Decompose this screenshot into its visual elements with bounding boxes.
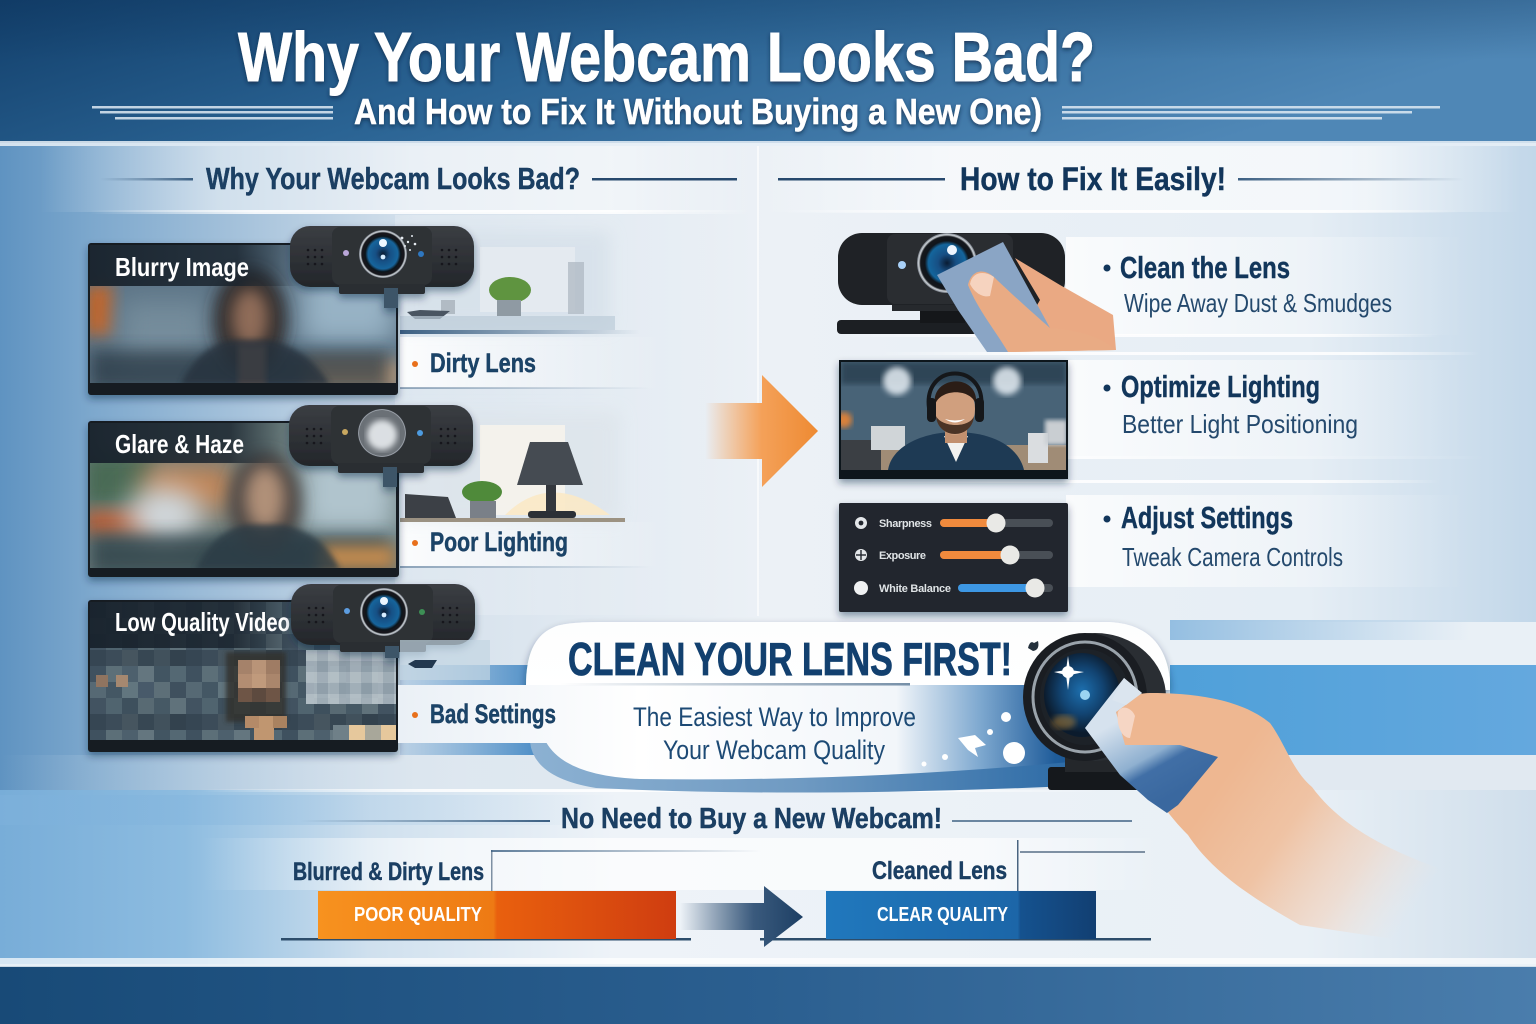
scene: desk behind third webcam xyxy=(400,640,490,680)
heading: how to fix it: How to Fix It Easily! xyxy=(960,161,1226,197)
cloth top fold xyxy=(1112,678,1142,705)
fix 2 image: well-lit video call xyxy=(836,360,1068,479)
bar: clear quality: CLEAR QUALITY xyxy=(877,904,1009,926)
arrow: before to after xyxy=(680,886,803,947)
fix 2 text xyxy=(1104,369,1358,439)
icon: dirty webcam xyxy=(290,226,474,308)
footer band xyxy=(0,964,1536,1024)
icon: wiping hand xyxy=(1010,258,1116,352)
callout heading: CLEAN YOUR LENS FIRST! xyxy=(568,633,1012,685)
comparison bars xyxy=(281,840,1151,947)
callout text: Your Webcam Quality xyxy=(663,735,885,765)
scene: desk lamp behind second webcam xyxy=(400,412,625,522)
icon: webcam with glare xyxy=(289,405,473,487)
label: cleaned lens: Cleaned Lens xyxy=(872,857,1007,885)
fix 3 text xyxy=(1104,500,1343,572)
header shade xyxy=(90,602,300,648)
cloth xyxy=(1085,678,1218,813)
label: low quality video: Low Quality Video xyxy=(115,607,290,637)
fix 3 text: Tweak Camera Controls xyxy=(1122,542,1343,572)
fix 1 text: Wipe Away Dust & Smudges xyxy=(1124,288,1392,318)
callout: clean your lens first xyxy=(398,622,1170,793)
label: blurry image: Blurry Image xyxy=(115,252,249,282)
fix 1 image: cleaning webcam xyxy=(837,233,1116,352)
title: Why Your Webcam Looks Bad? xyxy=(238,18,1095,96)
heading: why webcam looks bad: Why Your Webcam Looks Bad? xyxy=(206,161,580,196)
header shade xyxy=(90,245,300,286)
panel: glare and haze xyxy=(85,421,399,577)
sharpness slider: Sharpness xyxy=(879,518,932,530)
exposure slider xyxy=(855,546,1053,564)
scene: office shelf behind first webcam xyxy=(400,232,640,334)
fix 2 text: Better Light Positioning xyxy=(1122,409,1358,439)
fix 3 text: Adjust Settings xyxy=(1121,500,1293,535)
cause: bad settings: Bad Settings xyxy=(430,699,556,729)
icon: hand wiping lens xyxy=(1085,678,1450,940)
cause: bad settings xyxy=(412,699,556,729)
bar: poor quality: POOR QUALITY xyxy=(354,904,483,926)
callout text xyxy=(633,702,916,765)
sharpness slider xyxy=(855,514,1053,532)
panel: low quality video xyxy=(88,600,398,752)
ribbon base xyxy=(530,742,1070,793)
middle strip xyxy=(398,685,1088,743)
sparkles xyxy=(922,712,1025,766)
icon: large webcam lens xyxy=(1023,633,1166,790)
top cap xyxy=(526,622,1170,690)
fix 3 image: settings panel xyxy=(839,503,1068,612)
icon: webcam low quality xyxy=(291,584,475,658)
panel: blurry image xyxy=(85,243,400,395)
subtitle: And How to Fix It Without Buying a New One) xyxy=(354,91,1042,132)
white balance slider: White Balance xyxy=(879,583,951,595)
header shade xyxy=(90,423,290,463)
small mark xyxy=(1028,641,1038,651)
fix 1 text: Clean the Lens xyxy=(1120,250,1290,285)
label: blurred lens: Blurred & Dirty Lens xyxy=(293,858,484,886)
callout text: The Easiest Way to Improve xyxy=(633,702,916,732)
row strips xyxy=(400,237,1486,587)
thumb xyxy=(968,272,1115,352)
bar: clear quality xyxy=(826,891,1096,939)
icon: cloth xyxy=(937,242,1050,352)
header band xyxy=(0,0,1536,146)
white balance slider xyxy=(854,578,1053,598)
fix 1 text xyxy=(1104,250,1392,318)
nail xyxy=(1118,708,1135,738)
cause: poor lighting: Poor Lighting xyxy=(430,527,568,557)
cause: dirty lens: Dirty Lens xyxy=(430,348,536,378)
exposure slider: Exposure xyxy=(879,550,926,562)
heading: no need to buy: No Need to Buy a New Webcam! xyxy=(561,803,942,835)
bar: poor quality xyxy=(318,891,676,939)
label: glare and haze: Glare & Haze xyxy=(115,429,244,459)
fix 2 text: Optimize Lighting xyxy=(1121,369,1320,404)
arrow: problem to fix xyxy=(705,375,818,487)
